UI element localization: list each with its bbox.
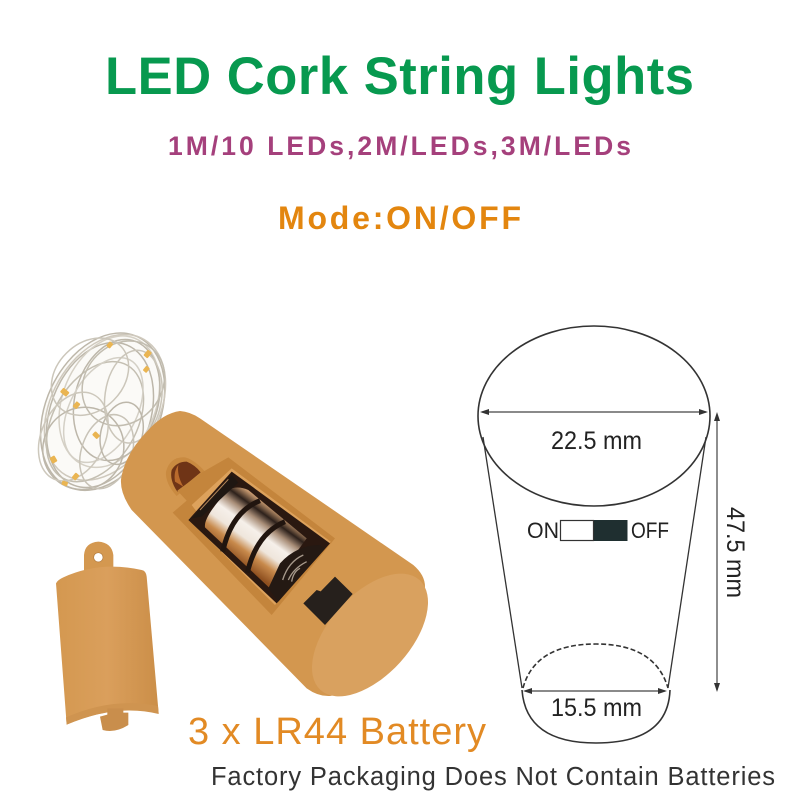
cork body	[121, 411, 450, 717]
packaging note: Factory Packaging Does Not Contain Batteries	[211, 763, 775, 791]
icon: LED beads	[49, 341, 152, 486]
label: 22.5 mm: 22.5 mm	[551, 427, 642, 455]
bottom dashed arc	[523, 644, 668, 688]
cover clip	[100, 708, 128, 731]
bay frame	[173, 457, 335, 615]
dimension diagram	[478, 326, 720, 743]
cork end face	[290, 553, 450, 717]
product photo: cork light with wire and battery cover	[16, 313, 450, 717]
label: 15.5 mm: 15.5 mm	[551, 694, 642, 722]
height arrow: 47.5 mm	[714, 412, 720, 692]
bay cavity	[188, 472, 330, 603]
power switch	[303, 577, 353, 625]
bottom arc	[522, 690, 670, 743]
cork side lines	[483, 437, 706, 688]
icon: coiled LED wire	[16, 313, 190, 511]
cover tab	[84, 542, 113, 572]
mode label: Mode:ON/OFF	[278, 200, 521, 236]
battery label: 3 x LR44 Battery	[188, 711, 486, 753]
width arrow: 22.5 mm	[480, 409, 708, 415]
label: ON: ON	[527, 518, 559, 543]
subtitle: lengths: 1M/10 LEDs,2M/LEDs,3M/LEDs	[168, 131, 631, 161]
battery spring end	[268, 545, 325, 602]
on/off switch graphic	[527, 518, 669, 543]
battery compartment	[166, 457, 353, 625]
label: 47.5 mm: 47.5 mm	[721, 507, 749, 598]
retaining clip	[192, 475, 238, 518]
battery cover	[56, 542, 159, 731]
width arrow: 15.5 mm	[523, 688, 667, 694]
label: OFF: OFF	[631, 518, 669, 543]
batteries	[205, 487, 307, 588]
top ellipse	[478, 326, 710, 506]
finger notch	[166, 457, 205, 496]
cell gaps	[223, 501, 285, 573]
title: LED Cork String Lights	[105, 47, 694, 106]
